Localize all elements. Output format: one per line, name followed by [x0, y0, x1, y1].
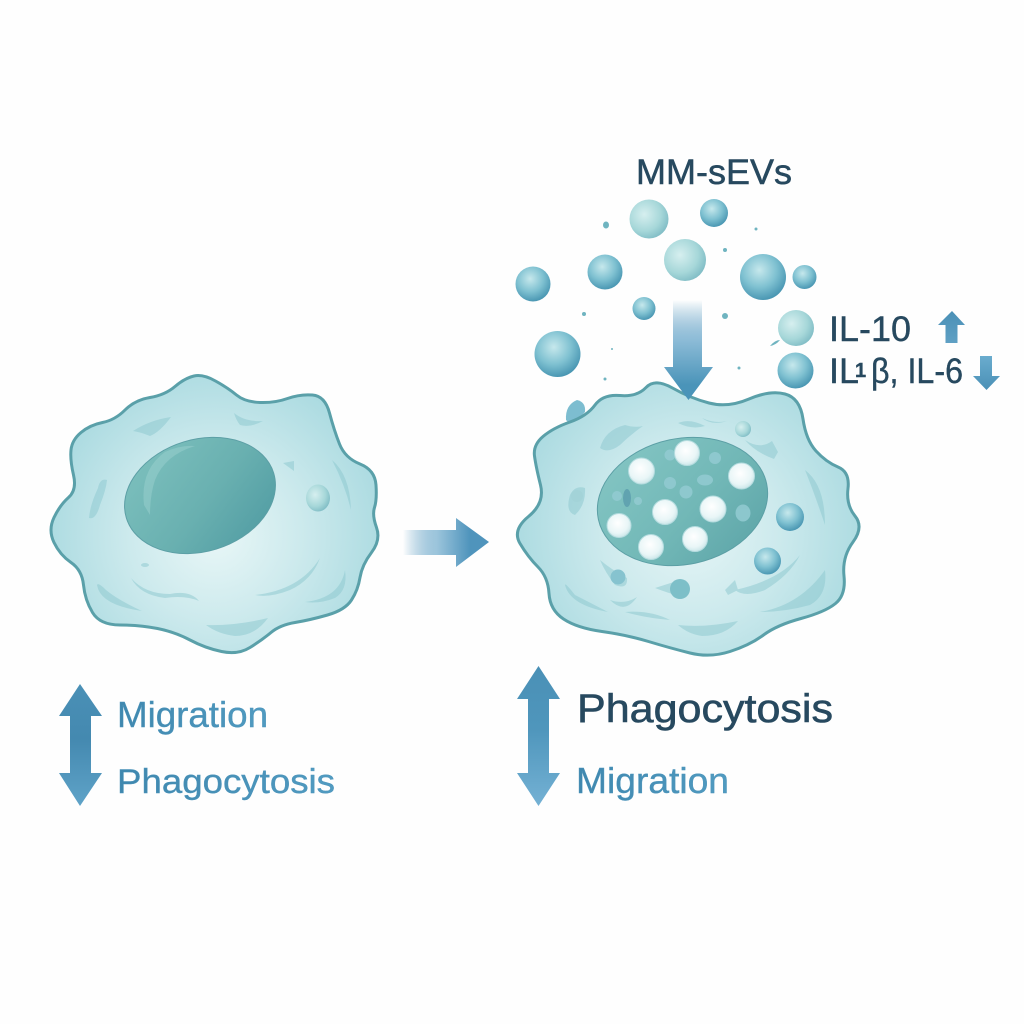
left cell nucleus [110, 419, 290, 572]
MM-sEVs label: MM-sEVs [636, 153, 792, 192]
right cell nucleus [585, 422, 780, 581]
IL-1β, IL-6 text: β, IL-6 [871, 352, 963, 391]
left nucleus highlight [143, 446, 195, 515]
left Phagocytosis label: Phagocytosis [117, 763, 335, 801]
left resting cell [51, 376, 378, 653]
left Migration label: Migration [117, 694, 268, 735]
vesicles in cytoplasm [571, 421, 804, 599]
right activated cell [517, 383, 859, 655]
left cell body [51, 376, 378, 653]
IL-1β, IL-6 text: 1 [855, 360, 866, 382]
IL-10 up arrow [938, 311, 965, 343]
small particles in nucleus [612, 450, 750, 522]
IL-10 text: IL-10 [829, 310, 911, 349]
left outcome group [59, 684, 335, 806]
right outcome group [517, 666, 833, 806]
left cell cytoplasm folds [89, 413, 351, 636]
IL-1β, IL-6 legend row [778, 352, 1000, 391]
right double arrow [517, 666, 560, 806]
left cell vesicle [306, 484, 330, 512]
floating MM-sEV particles [516, 199, 816, 380]
IL-1β, IL-6 text: IL [829, 352, 859, 391]
right cell cytoplasm folds [565, 418, 825, 636]
right Migration label: Migration [576, 760, 729, 801]
IL-10 sphere [778, 310, 814, 346]
internalized white vesicles [607, 440, 754, 560]
IL-10 legend row [778, 310, 965, 349]
droplet budding from right cell [566, 400, 585, 424]
down arrow into cell [664, 300, 713, 400]
right Phagocytosis label: Phagocytosis [577, 687, 833, 731]
IL-1β down arrow [973, 356, 1000, 390]
horizontal arrow [403, 518, 489, 567]
left double arrow [59, 684, 102, 806]
IL-1β sphere [778, 352, 814, 388]
right cell body [517, 383, 859, 655]
